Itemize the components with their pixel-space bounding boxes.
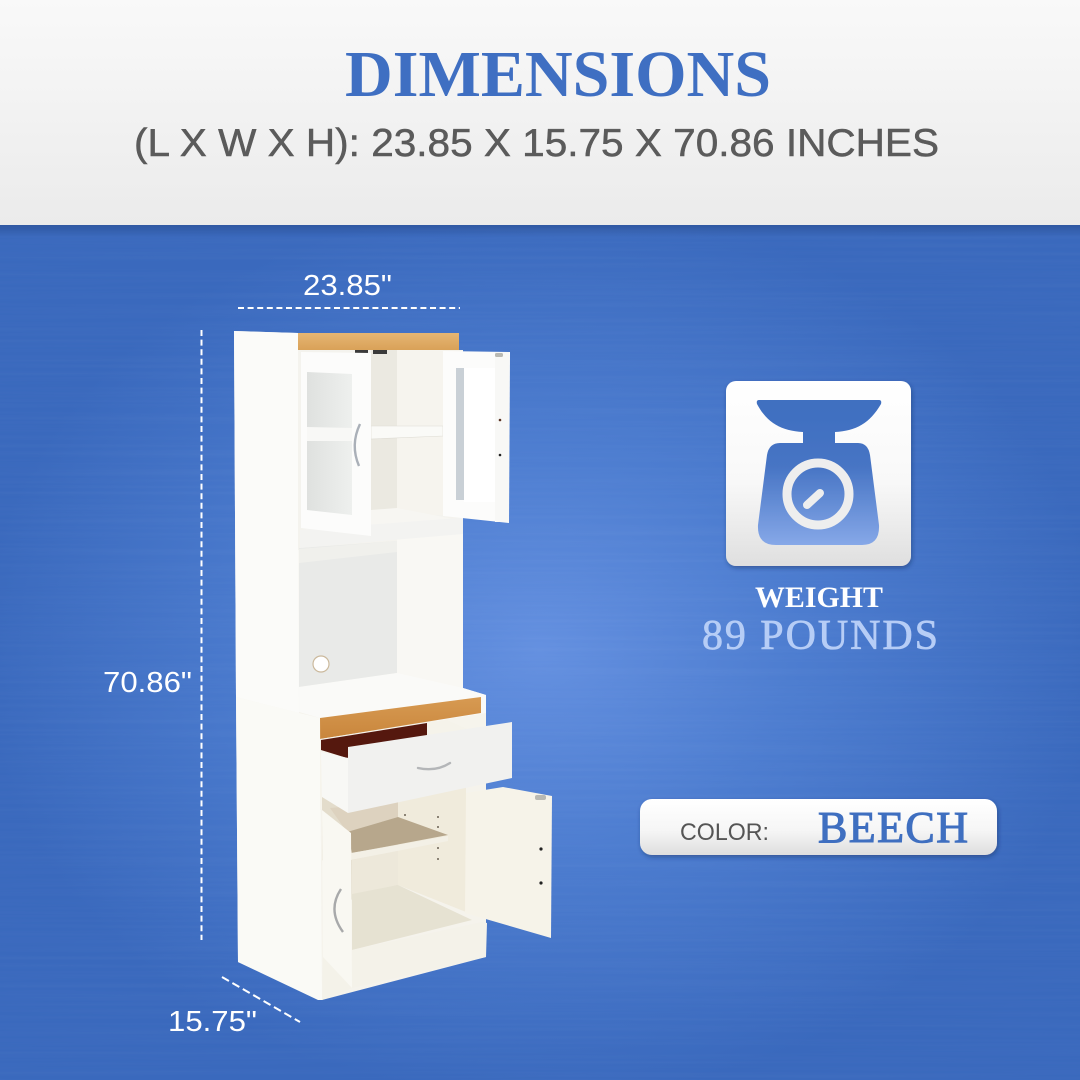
base plinth: [322, 922, 487, 1000]
open drawer: [321, 722, 512, 813]
lower cabinet side: [236, 697, 322, 1000]
colour value: BEECH: [818, 803, 968, 852]
colour pill: [640, 799, 997, 855]
subtitle: overall dimensions: (L X W X H): 23.85 X 15.75 X 70.86 INCHES: [134, 122, 939, 165]
weight icon card: [726, 381, 911, 566]
door hinges: [355, 350, 387, 354]
blue background panel: [0, 225, 1080, 1080]
lower right front strip: [320, 713, 486, 810]
cabinet silhouette backing: [234, 331, 486, 1000]
header band: [0, 0, 1080, 225]
title: DIMENSIONS: [345, 38, 771, 111]
wood top board: [298, 333, 459, 350]
mid shelf: [300, 508, 463, 548]
lower left door: [322, 810, 352, 988]
height dimension: 70.86": [103, 667, 192, 699]
upper right glass door: [443, 351, 510, 523]
upper shelf: [371, 426, 443, 439]
width dimension: 23.85": [303, 270, 392, 302]
wood counter edge: [320, 697, 481, 739]
kitchen cabinet product illustration: [234, 331, 552, 1000]
icon: kitchen scale: [757, 400, 881, 545]
weight value: 89 POUNDS: [702, 613, 938, 659]
colour label: COLOR:: [680, 819, 769, 846]
lower cabinet interior: [322, 785, 472, 950]
lower right door: [465, 787, 552, 938]
microwave cavity: [299, 530, 486, 722]
depth dimension: 15.75": [168, 1006, 257, 1038]
depth dimension: [168, 977, 300, 1038]
drawer cavity: [321, 723, 427, 758]
weight label: WEIGHT: [755, 581, 883, 614]
upper cabinet carcass: [234, 331, 463, 713]
upper left glass door: [301, 352, 371, 536]
